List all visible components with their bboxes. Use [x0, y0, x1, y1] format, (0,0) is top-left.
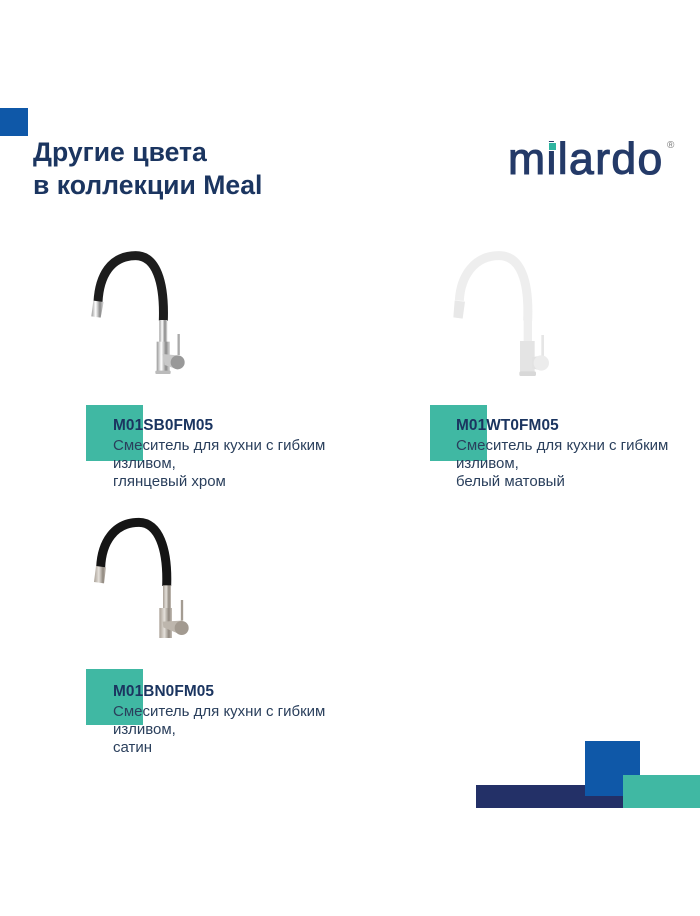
title — [33, 137, 262, 200]
faucet: matte white — [454, 251, 549, 376]
logo: milardo: milardo — [508, 135, 664, 184]
product card: M01BN0FM05: Смеситель для кухни с гибким — [113, 703, 325, 720]
product card: M01BN0FM05: сатин — [113, 739, 152, 756]
faucet: glossy chrome with black spout — [91, 251, 185, 374]
product card: M01SB0FM05 — [86, 405, 325, 490]
faucet: satin with black spout — [94, 518, 189, 638]
product card: M01SB0FM05: глянцевый хром — [113, 473, 226, 490]
product card: M01WT0FM05: изливом, — [456, 455, 519, 472]
title: в коллекции Meal — [33, 170, 262, 200]
product card: M01WT0FM05: Смеситель для кухни с гибким — [456, 437, 668, 454]
bottom-right decorative blocks — [476, 741, 700, 808]
product card: M01SB0FM05: M01SB0FM05 — [113, 417, 213, 434]
corner accent square — [0, 108, 28, 136]
product card: M01SB0FM05: Смеситель для кухни с гибким — [113, 437, 325, 454]
product card: M01WT0FM05: белый матовый — [456, 473, 565, 490]
product card: M01WT0FM05 — [430, 405, 668, 490]
title: Другие цвета — [33, 137, 207, 167]
product card: M01BN0FM05: изливом, — [113, 721, 176, 738]
product card: M01BN0FM05: M01BN0FM05 — [113, 683, 214, 700]
product card: M01WT0FM05: M01WT0FM05 — [456, 417, 559, 434]
logo: milardo: ® — [667, 140, 674, 151]
product card: M01BN0FM05 — [86, 669, 325, 756]
product card: M01SB0FM05: изливом, — [113, 455, 176, 472]
